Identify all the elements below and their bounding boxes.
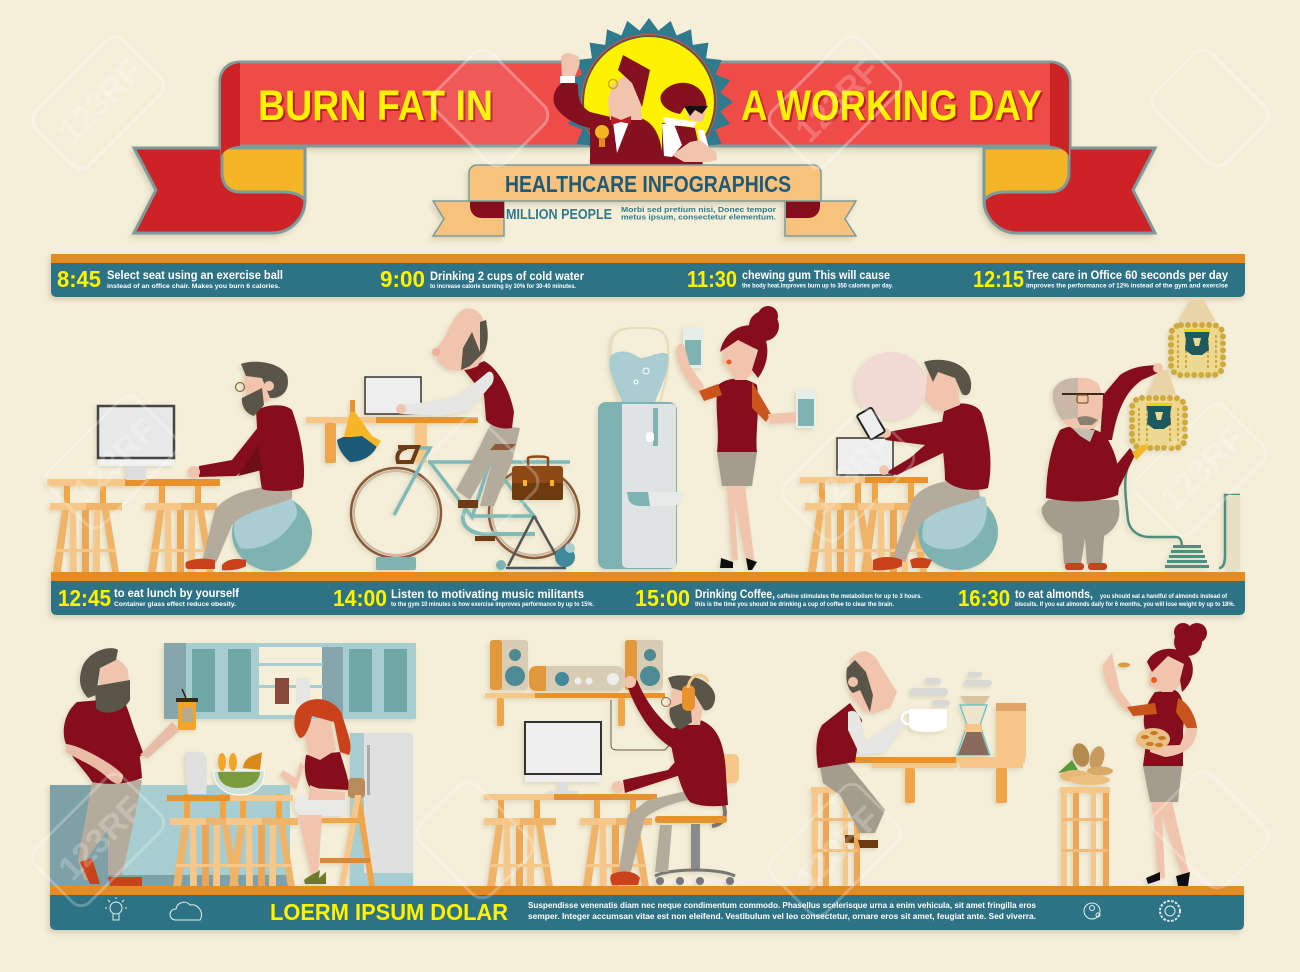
- right ribbon tail: [984, 148, 1155, 233]
- stools and desk: [800, 477, 930, 572]
- man: [64, 648, 180, 886]
- counter: [50, 785, 290, 886]
- stool: [811, 787, 861, 886]
- desk with brackets: [306, 400, 478, 463]
- scene: man drinking coffee at wall shelf: [811, 652, 1026, 886]
- cup: [176, 689, 198, 730]
- helmet: [337, 412, 381, 462]
- entry 8:45: 8:45: [57, 266, 101, 292]
- entry 9:00: to increase calorie burning by 30% for 30-40 minutes.: [430, 283, 576, 290]
- entry 16:30: biscuits. If you eat almonds daily for 6 months, you will lose weight by up to 18%.: [1015, 601, 1235, 608]
- entry 12:45: 12:45: [58, 585, 111, 611]
- watermarks: 123RF: [65, 411, 164, 510]
- watermarks: 123RF: [51, 52, 150, 151]
- man: [185, 362, 304, 570]
- title banner: [134, 62, 1155, 233]
- entry 14:00: Listen to motivating music militants: [391, 587, 584, 601]
- woman: [1103, 623, 1207, 886]
- amplifier: [529, 666, 625, 691]
- ribbon tails: [433, 201, 504, 236]
- entry 11:30: [687, 266, 893, 292]
- watermarks: 123RF: [788, 51, 887, 150]
- hanging plant top: [1171, 300, 1223, 375]
- heading: a working day: A WORKING DAY: [741, 82, 1042, 130]
- entry 14:00: to the gym 10 minutes is how exercise improves performance by up to 15%.: [391, 601, 594, 608]
- wall shelf: [485, 693, 665, 726]
- entry 9:00: Drinking 2 cups of cold water: [430, 269, 584, 283]
- entry 8:45: [57, 266, 283, 292]
- entry 16:30: 16:30: [958, 585, 1010, 611]
- chair: [655, 754, 739, 885]
- entry 11:30: 11:30: [687, 266, 737, 292]
- speakers: [490, 640, 663, 690]
- woman with arms crossed: [660, 83, 717, 165]
- icon: cloud: [170, 902, 202, 920]
- briefcase: [512, 456, 563, 500]
- scene: man blowing bubble gum on exercise ball: [800, 352, 998, 572]
- man: [396, 308, 520, 508]
- million people label: MILLION PEOPLE: [506, 207, 612, 223]
- fridge: [350, 733, 413, 886]
- entry 12:15: Tree care in Office 60 seconds per day: [1026, 268, 1228, 282]
- tablet: [837, 438, 893, 475]
- watermarks: 123RF: [51, 789, 150, 888]
- entry 12:45: [58, 585, 240, 611]
- stand feet: [376, 536, 575, 570]
- stools and desk: [167, 794, 298, 887]
- entry 15:00: caffeine stimulates the metabolism for up to 3 hours.: [777, 593, 922, 600]
- watermarks: 123RF: [1153, 419, 1252, 518]
- audio cable: [611, 700, 672, 750]
- badge with characters: [554, 18, 733, 186]
- watermarks: 123RF: [801, 424, 900, 523]
- jug: [185, 752, 207, 794]
- subtitle ribbon: [433, 165, 856, 236]
- subtitle description: Morbi sed pretium nisi, Donec tempor: [621, 205, 776, 214]
- stools and desk: [484, 794, 657, 887]
- chair: [313, 778, 375, 886]
- entry 12:15: improves the performance of 12% instead of the gym and exercise: [1026, 282, 1228, 290]
- hose and tap: [1125, 462, 1240, 570]
- main red band: [220, 62, 1070, 146]
- scene: woman eating almonds: [1058, 623, 1207, 886]
- entry 9:00: 9:00: [380, 266, 425, 292]
- entry 16:30: [958, 585, 1235, 611]
- heading: a working day: A WORKING DAY: [743, 84, 1044, 132]
- subtitle description: metus ipsum, consectetur elementum.: [621, 212, 776, 222]
- timeline bar 1: [51, 254, 1245, 297]
- entry 12:45: Container glass effect reduce obesity.: [114, 601, 236, 608]
- icon: gear: [1160, 901, 1180, 921]
- scene: kitchen lunch: [50, 643, 416, 887]
- entry 14:00: [333, 585, 594, 611]
- laptop: [365, 377, 421, 414]
- man flexing: [554, 53, 663, 166]
- man: [610, 675, 728, 885]
- scene: man on stationary bicycle: [306, 308, 579, 570]
- woman: [280, 699, 351, 884]
- glass 1: [683, 328, 703, 368]
- scene: man at music workstation: [484, 640, 739, 887]
- fruit bowl: [214, 752, 264, 795]
- stools and desk: [47, 479, 220, 572]
- footer heading: LOERM IPSUM DOLAR: [270, 899, 508, 925]
- bicycle: [351, 447, 579, 568]
- entry 8:45: Select seat using an exercise ball: [107, 268, 283, 282]
- footer bar: [50, 886, 1244, 930]
- glass 2: [796, 389, 816, 428]
- heading: burn fat in: BURN FAT IN: [260, 84, 495, 132]
- entry 12:15: 12:15: [973, 266, 1024, 292]
- footer text: Suspendisse venenatis diam nec neque condimentum commodo. Phasellus scelerisque urna a enim vehicula, sit amet fringilla eros: [528, 900, 1036, 910]
- ribbon face: [469, 165, 821, 201]
- man: [857, 360, 990, 570]
- subtitle: HEALTHCARE INFOGRAPHICS: [505, 171, 791, 197]
- man: [1042, 363, 1163, 570]
- water cooler: [598, 328, 683, 569]
- scene: older man caring for office plants: [1042, 300, 1240, 570]
- scene: water cooler and woman: [598, 306, 816, 570]
- wall shelf: [853, 757, 1025, 803]
- entry 8:45: instead of an office chair. Makes you burn 6 calories.: [107, 283, 280, 290]
- entry 16:30: to eat almonds,: [1015, 587, 1093, 601]
- icon: teal seal: [565, 18, 733, 186]
- entry 11:30: the body heat.Improves burn up to 350 calories per day.: [742, 282, 893, 290]
- chemex coffee maker: [957, 696, 990, 755]
- timeline bar 2: [51, 572, 1245, 615]
- entry 15:00: [635, 585, 922, 611]
- icon: food: [1084, 903, 1100, 919]
- entry 16:30: you should eat a handful of almonds instead of: [1100, 593, 1228, 600]
- exercise ball: [232, 495, 312, 571]
- wall cabinets: [164, 643, 416, 719]
- icon: light bulb: [105, 897, 127, 920]
- entry 15:00: 15:00: [635, 585, 690, 611]
- monitor: [98, 406, 174, 480]
- left ribbon tail: [134, 148, 305, 233]
- stool: [1060, 787, 1110, 886]
- monitor: [525, 722, 601, 794]
- entry 12:15: [973, 266, 1228, 292]
- entry 11:30: chewing gum This will cause: [742, 268, 890, 282]
- man: [816, 652, 905, 848]
- subtitle description: [621, 205, 776, 222]
- steam: [910, 672, 992, 706]
- watermarks: 123RF: [788, 799, 887, 898]
- almond pile: [1058, 741, 1113, 785]
- exercise ball: [918, 494, 998, 570]
- coffee cup: [902, 709, 947, 732]
- bubble gum: [855, 352, 927, 420]
- entry 9:00: [380, 266, 584, 292]
- hanging plant bottom: [1132, 370, 1185, 448]
- woman: [676, 306, 798, 570]
- entry 15:00: this is the time you should be drinking a cup of coffee to clear the brain.: [695, 601, 894, 608]
- entry 12:45: to eat lunch by yourself: [114, 586, 240, 600]
- heading: burn fat in: BURN FAT IN: [258, 82, 493, 130]
- footer text: [528, 900, 1036, 921]
- scene: man on exercise ball at computer: [47, 362, 312, 572]
- entry 14:00: 14:00: [333, 585, 387, 611]
- coffee bag: [996, 703, 1026, 757]
- footer text: semper. Integer accumsan vitae est non eleifend. Vestibulum vel leo consectetur, ornare eros sit amet, feugiat ante. Sed viverra.: [528, 911, 1036, 921]
- entry 15:00: Drinking Coffee,: [695, 587, 775, 601]
